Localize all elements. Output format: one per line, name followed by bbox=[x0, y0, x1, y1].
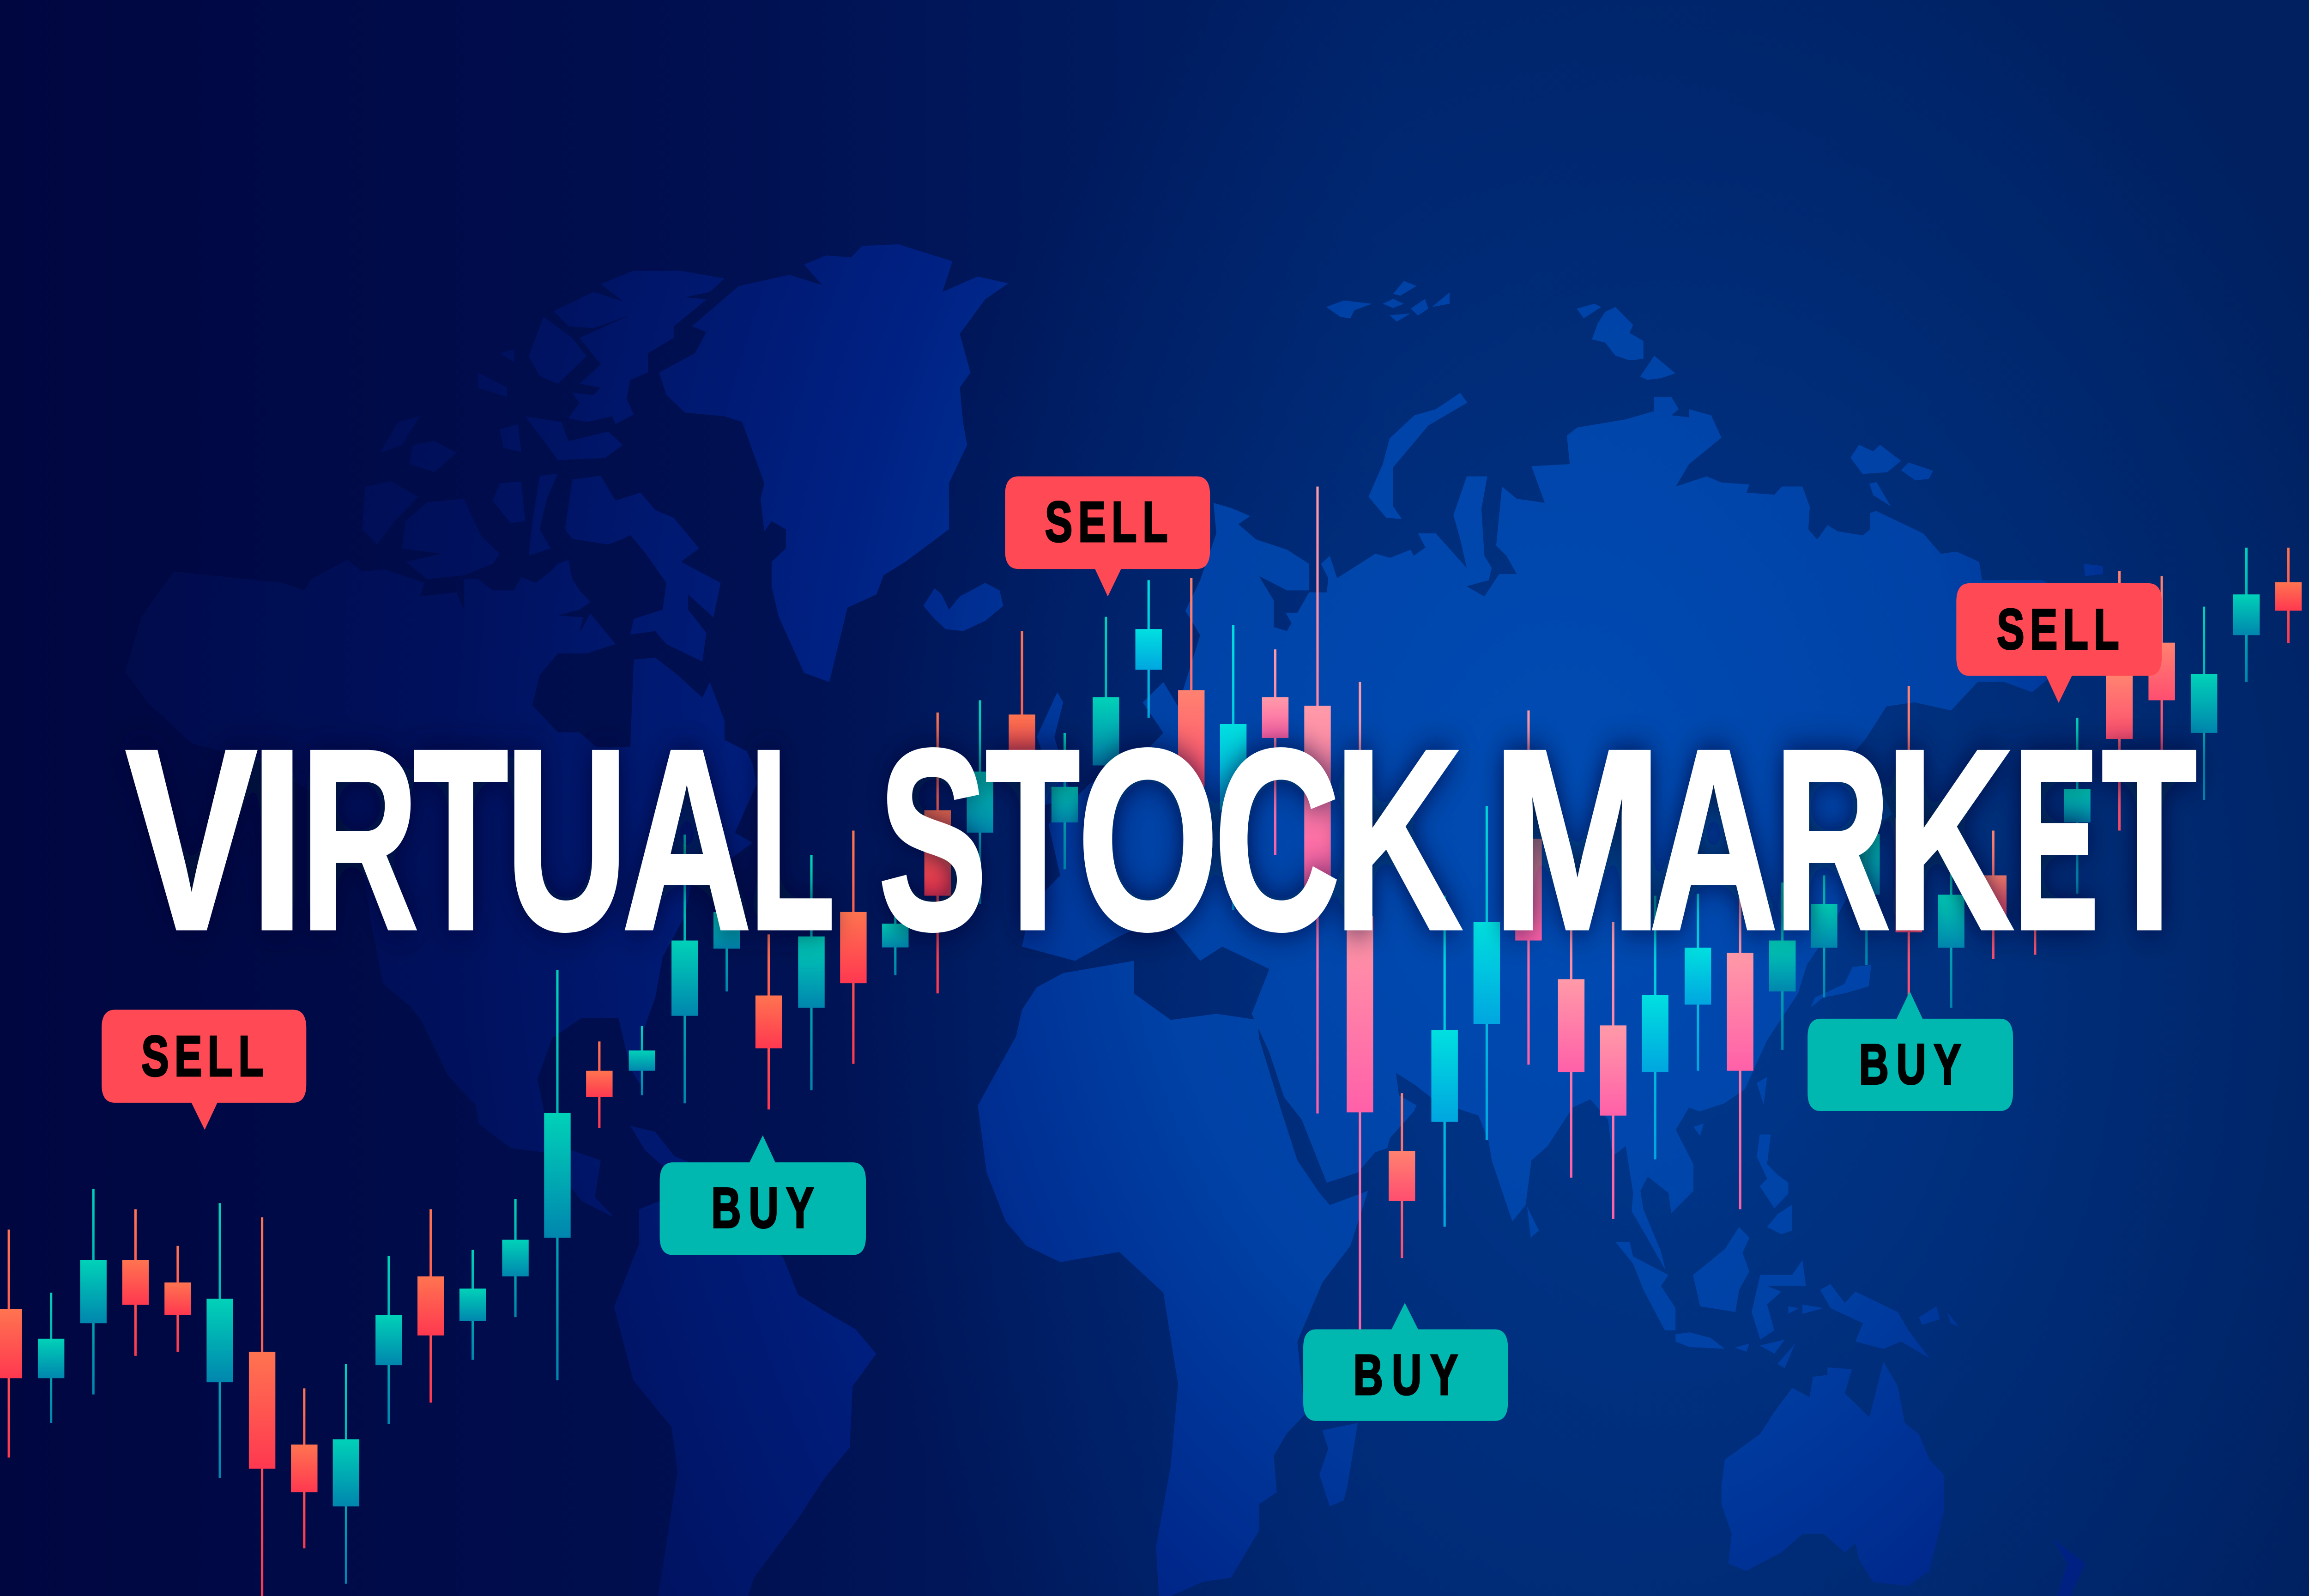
title bbox=[126, 696, 2197, 984]
canadian arctic islands bbox=[362, 271, 725, 662]
candle 49 bbox=[2034, 896, 2036, 955]
title: R bbox=[301, 696, 418, 984]
candle 54 bbox=[2233, 548, 2260, 682]
candle 35 bbox=[1431, 896, 1458, 1227]
candle 13 bbox=[502, 1199, 529, 1317]
novaya zemlya bbox=[1368, 393, 1467, 519]
title: A bbox=[1649, 696, 1778, 984]
candlestick chart bbox=[0, 487, 2302, 1596]
candle 14 bbox=[544, 970, 571, 1380]
madagascar bbox=[1319, 1423, 1358, 1506]
callout: buy left: BUY bbox=[711, 1176, 814, 1239]
borneo bbox=[1693, 1227, 1749, 1312]
united kingdom bbox=[1037, 692, 1072, 806]
candle 30 bbox=[1220, 625, 1246, 910]
title: R bbox=[1774, 696, 1891, 984]
philippines bbox=[1757, 1135, 1792, 1234]
callout: buy right bbox=[1807, 991, 2013, 1111]
candle 8 bbox=[291, 1388, 318, 1548]
title: K bbox=[1885, 696, 2013, 984]
candle 18 bbox=[713, 876, 740, 991]
title: M bbox=[1492, 696, 1663, 984]
candle 3 bbox=[80, 1189, 107, 1395]
candle 17 bbox=[671, 834, 698, 1103]
greenland bbox=[659, 244, 1008, 682]
callout: sell right bbox=[1956, 583, 2162, 703]
candle 1 bbox=[0, 1230, 22, 1457]
candle 31 bbox=[1262, 649, 1288, 855]
candle 20 bbox=[798, 855, 825, 1090]
title: V bbox=[126, 696, 258, 984]
candle 43 bbox=[1769, 883, 1795, 1050]
title: C bbox=[1214, 696, 1340, 984]
candle 42 bbox=[1727, 894, 1753, 1209]
candle 40 bbox=[1642, 896, 1668, 1159]
candle 51 bbox=[2106, 571, 2133, 831]
candle 5 bbox=[164, 1246, 191, 1352]
callout: sell left: SELL bbox=[141, 1024, 264, 1088]
candle 47 bbox=[1938, 855, 1964, 1008]
candle 50 bbox=[2064, 718, 2091, 894]
south asia islands bbox=[1527, 1077, 1767, 1238]
sulawesi and moluccas bbox=[1752, 1260, 1824, 1340]
candle 21 bbox=[840, 831, 867, 1064]
title: A bbox=[622, 696, 752, 984]
title: K bbox=[1334, 696, 1462, 984]
callout: buy center bbox=[1303, 1303, 1508, 1421]
japan bbox=[1811, 965, 1871, 1008]
title: T bbox=[2102, 696, 2197, 984]
africa bbox=[978, 961, 1368, 1596]
candle 2 bbox=[38, 1293, 64, 1423]
eurasia bbox=[1022, 397, 2079, 1270]
cuba and caribbean bbox=[630, 1126, 721, 1193]
south america bbox=[614, 1193, 876, 1596]
callout: sell center bbox=[1005, 477, 1210, 597]
candle 24 bbox=[967, 700, 993, 904]
world map bbox=[125, 244, 2103, 1596]
candle 27 bbox=[1093, 617, 1119, 855]
callout: buy left bbox=[660, 1135, 866, 1255]
callout: sell center: SELL bbox=[1045, 490, 1168, 554]
candle 52 bbox=[2148, 576, 2175, 751]
candle 11 bbox=[417, 1209, 444, 1403]
iceland bbox=[923, 583, 1003, 631]
title: O bbox=[1077, 696, 1219, 984]
title: T bbox=[413, 696, 508, 984]
candle 39 bbox=[1600, 922, 1626, 1219]
title: T bbox=[985, 696, 1080, 984]
title: U bbox=[505, 696, 628, 984]
callout: sell right: SELL bbox=[1997, 597, 2119, 661]
title: S bbox=[878, 696, 987, 984]
callout: buy center: BUY bbox=[1353, 1342, 1458, 1407]
candle 37 bbox=[1515, 710, 1542, 1064]
candle 10 bbox=[375, 1256, 402, 1424]
candle 46 bbox=[1896, 686, 1922, 998]
candle 26 bbox=[1052, 733, 1078, 869]
candle 19 bbox=[756, 934, 782, 1109]
candle 44 bbox=[1811, 876, 1838, 998]
title: L bbox=[749, 696, 835, 984]
candle 53 bbox=[2191, 607, 2217, 800]
candle 33 bbox=[1347, 682, 1373, 1333]
candle 32 bbox=[1304, 487, 1331, 1113]
candle 29 bbox=[1178, 578, 1204, 865]
candle 23 bbox=[925, 713, 951, 993]
candle 6 bbox=[206, 1203, 233, 1478]
candle 7 bbox=[249, 1217, 275, 1596]
callout: sell left bbox=[102, 1010, 306, 1130]
title: E bbox=[2013, 696, 2099, 984]
candle 12 bbox=[459, 1250, 486, 1360]
candle 45 bbox=[1853, 763, 1880, 965]
sumatra and java bbox=[1615, 1242, 1795, 1368]
candle 28 bbox=[1136, 580, 1162, 718]
candle 38 bbox=[1558, 906, 1584, 1178]
candle 48 bbox=[1980, 831, 2007, 959]
candle 36 bbox=[1474, 806, 1500, 1140]
north america bbox=[125, 560, 757, 1217]
candle 55 bbox=[2275, 548, 2302, 643]
title: I bbox=[250, 696, 304, 984]
new guinea bbox=[1820, 1284, 1959, 1358]
svalbard and arctic islands bbox=[1326, 281, 2103, 576]
australia bbox=[1722, 1362, 1944, 1586]
candle 22 bbox=[882, 896, 908, 975]
candle 16 bbox=[629, 1026, 655, 1095]
candle 34 bbox=[1389, 1093, 1415, 1258]
candle 25 bbox=[1009, 631, 1035, 876]
callout: buy right: BUY bbox=[1859, 1032, 1961, 1096]
candle 4 bbox=[122, 1209, 149, 1356]
candle 41 bbox=[1685, 894, 1711, 1071]
candle 15 bbox=[586, 1041, 613, 1128]
candle 9 bbox=[333, 1364, 359, 1584]
new zealand bbox=[2053, 1539, 2085, 1596]
